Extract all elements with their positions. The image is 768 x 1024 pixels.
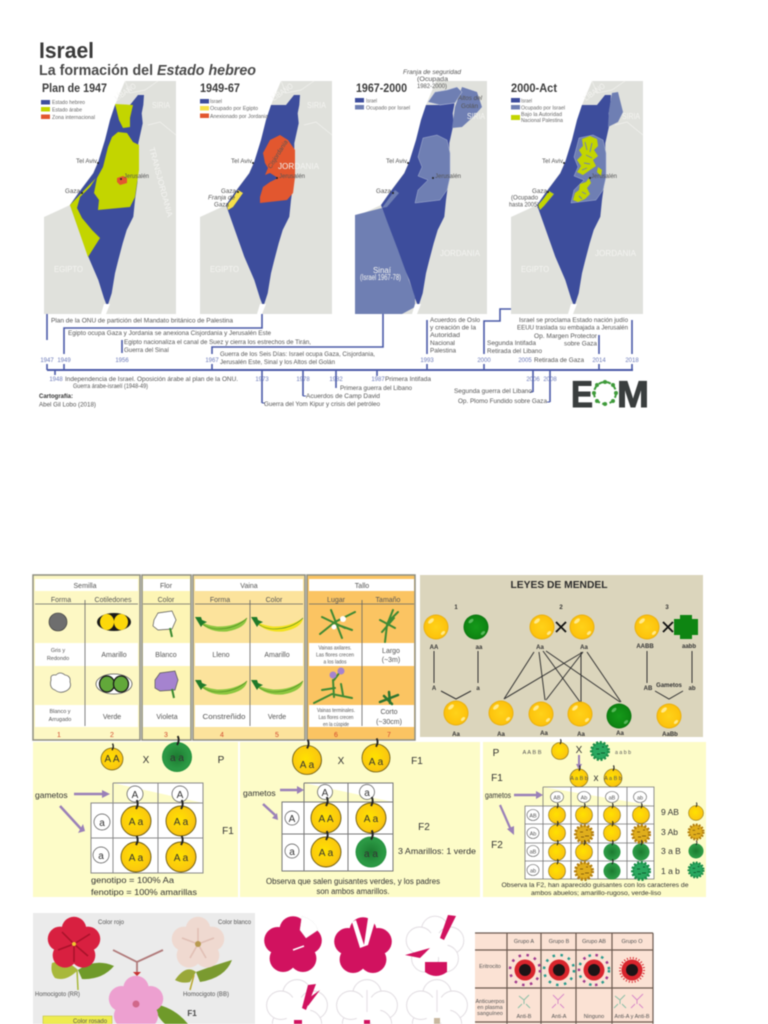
- panel: Leyes de Mendel: aabb: [682, 644, 696, 650]
- panel: tabla de caracteres Vaina: 5: [275, 732, 279, 739]
- panel: cruce dihibrido: AB: [529, 814, 537, 820]
- panel: tabla de caracteres Semilla: Verde: [103, 714, 121, 721]
- panel: cruce dihibrido: Ab: [530, 832, 536, 838]
- panel: cruce dihibrido: F1: [491, 773, 503, 784]
- panel: tabla de caracteres Tallo: Vainas axilares.: [318, 646, 352, 652]
- panel: cruce dihibrido: P: [493, 748, 500, 759]
- panel: Leyes de Mendel: aa: [476, 645, 483, 651]
- panel: cruce dihibrido: ab: [637, 796, 643, 802]
- panel: map 2000-Act: JORDANIA: [595, 249, 637, 258]
- panel: map 2000-Act: Ocupado por Israel: [521, 106, 565, 112]
- panel: Leyes de Mendel: Aa: [580, 645, 588, 651]
- panel: cruce monohibrido F2: a: [289, 847, 295, 858]
- panel: Leyes de Mendel: Aa: [577, 732, 585, 738]
- panel: grupos sanguíneos: [475, 933, 653, 1024]
- panel: cruce monohibrido F1: F1: [222, 826, 234, 837]
- panel: map 1967-2000: Jerusalén: [435, 173, 461, 180]
- timeline: Retirada de Gaza: [534, 358, 585, 364]
- panel: tabla de caracteres Tallo: Largo: [382, 648, 400, 655]
- panel: map Plan de 1947: Gaza: [65, 188, 80, 195]
- panel: map 1949-67: Jerusalén: [279, 173, 305, 180]
- panel: map 2000-Act: Gaza: [532, 188, 547, 195]
- panel: Leyes de Mendel: Aa: [536, 645, 544, 651]
- panel: cruce monohibrido F1: A: [177, 790, 184, 801]
- panel: map Plan de 1947: Estado hebreo: [52, 100, 85, 106]
- logo: EOM: [571, 374, 649, 415]
- timeline: Israel se proclama Estado nación judío: [519, 318, 629, 324]
- panel: cruce monohibrido F1: X: [143, 755, 150, 766]
- panel: map 1967-2000: Franja de seguridad: [403, 69, 461, 76]
- panel: tabla de caracteres Tallo: 7: [387, 732, 391, 739]
- panel: cruce monohibrido F1: A a: [129, 817, 144, 828]
- panel: map 2000-Act: LÍBANO: [582, 82, 607, 103]
- panel: tabla de caracteres Vaina: Constreñido: [202, 714, 246, 721]
- panel: cruce dihibrido: AB: [553, 796, 561, 802]
- panel: cruce dihibrido: gametos: [485, 790, 511, 800]
- panel: herencia color de flor: Color rojo: [98, 919, 124, 926]
- panel: cruce dihibrido: A a B b: [604, 776, 622, 782]
- panel: map 1967-2000: JORDANIA: [440, 249, 481, 258]
- panel: grupos sanguíneos: Eritrocito: [479, 964, 501, 970]
- timeline: Guerra árabe-israelí (1948-49): [73, 384, 148, 390]
- logo: EOM: E: [571, 374, 593, 415]
- panel: map Plan de 1947: EGIPTO: [54, 265, 83, 274]
- panel: Leyes de Mendel: a: [476, 686, 480, 692]
- title: Israel: [39, 38, 94, 63]
- panel: map Plan de 1947: SIRIA: [152, 101, 171, 110]
- panel: tabla de caracteres Tallo: Lugar: [327, 597, 346, 604]
- panel: cruce dihibrido: aB: [530, 850, 537, 856]
- panel: map 1949-67: SIRIA: [307, 101, 327, 110]
- panel: map 1967-2000: [355, 69, 487, 314]
- panel: cruce monohibrido F1: A a: [174, 853, 189, 864]
- panel: tabla de caracteres Tallo: Las flores crecen: [318, 715, 354, 721]
- panel: cruce dihibrido: Ab: [581, 796, 587, 802]
- timeline: 1967: [205, 358, 219, 364]
- timeline: Independencia de Israel. Oposición árabe al plan de la ONU.: [65, 377, 238, 383]
- panel: cruce dihibrido: ambos abuelos; amarillo-rugoso, verde-liso: [531, 890, 661, 897]
- panel: Leyes de Mendel: LEYES DE MENDEL: [510, 579, 608, 591]
- panel: tabla de caracteres Semilla: 1: [57, 732, 61, 739]
- timeline: y creación de la: [430, 326, 477, 332]
- timeline: Palestina: [430, 348, 457, 354]
- panel: map 2000-Act: Tel Aviv: [542, 158, 564, 165]
- panel: map 1967-2000: Tel Aviv: [386, 158, 408, 165]
- panel: tabla de caracteres Flor: Blanco: [155, 652, 177, 659]
- panel: map 1949-67: Tel Aviv: [231, 158, 253, 165]
- panel: map 1949-67: Gaza: [214, 202, 229, 208]
- timeline: Acuerdos de Oslo: [430, 318, 481, 324]
- panel: map 1949-67: Franja de: [208, 194, 235, 202]
- timeline: Retirada del Libano: [487, 349, 543, 355]
- logo: EOM: M: [617, 374, 649, 415]
- timeline: 1982: [329, 377, 343, 383]
- panel: herencia color de flor: Homocigoto (RR): [35, 991, 80, 998]
- timeline: 2014: [592, 358, 606, 364]
- timeline: Op. Plomo Fundido sobre Gaza: [458, 399, 548, 405]
- panel: map 2000-Act: Nacional Palestina: [521, 118, 563, 124]
- panel: cruce monohibrido F2: A a: [369, 757, 384, 768]
- panel: cruce monohibrido F2: [240, 738, 480, 897]
- panel: cruce monohibrido F2: F1: [411, 756, 423, 767]
- panel: map 1949-67: Gaza: [221, 188, 236, 195]
- panel: tabla de caracteres Semilla: [33, 575, 140, 740]
- panel: cruce monohibrido F2: 3 Amarillos: 1 verde: [398, 846, 476, 856]
- panel: Leyes de Mendel: Aa: [616, 731, 624, 737]
- panel: map 2000-Act: hasta 2005): [509, 202, 539, 208]
- panel: Leyes de Mendel: AABB: [636, 644, 654, 650]
- panel: map 1949-67: JORDANIA: [278, 162, 320, 171]
- panel: map 1967-2000: Altos del: [457, 95, 483, 102]
- panel: map Plan de 1947: TRANSJORDANIA: [147, 146, 175, 219]
- panel: tabla de caracteres Tallo: Tamaño: [376, 597, 401, 604]
- panel: tabla de caracteres Tallo: en la cúspide: [323, 722, 349, 728]
- panel: tabla de caracteres Flor: Color: [158, 597, 175, 604]
- panel: map Plan de 1947: Zona internacional: [52, 115, 95, 121]
- panel: tabla de caracteres Tallo: a los lados: [324, 660, 347, 666]
- panel: cruce monohibrido F2: a a: [364, 849, 378, 860]
- timeline: Egipto ocupa Gaza y Jordania se anexiona Cisjordania y Jerusalén Este: [68, 331, 272, 337]
- panel: grupos sanguíneos: Grupo O: [621, 939, 643, 945]
- timeline: 2005: [518, 358, 532, 364]
- panel: Leyes de Mendel: 1: [454, 605, 458, 611]
- panel: map Plan de 1947: Estado árabe: [52, 108, 82, 114]
- panel: map 1967-2000: Ocupado por Israel: [366, 106, 410, 112]
- timeline: Nacional: [430, 341, 455, 347]
- panel: cruce monohibrido F1: a: [99, 818, 105, 829]
- panel: cruce monohibrido F1: a a: [170, 753, 184, 764]
- panel: map 1949-67: LÍBANO: [270, 82, 295, 103]
- panel: Leyes de Mendel: ab: [688, 686, 696, 692]
- panel: Leyes de Mendel: 3: [665, 605, 669, 611]
- panel: tabla de caracteres Semilla: Semilla: [74, 583, 97, 590]
- timeline: 1973: [255, 377, 269, 383]
- panel: Leyes de Mendel: Aa: [452, 732, 460, 738]
- panel: grupos sanguíneos: Grupo B: [549, 939, 570, 945]
- panel: tabla de caracteres Tallo: Las flores crecen: [316, 652, 354, 658]
- panel: cruce dihibrido: Observa la F2, han aparecido guisantes con los caracteres de: [502, 882, 689, 889]
- timeline: Primera Intifada: [385, 377, 432, 383]
- panel: Leyes de Mendel: Aa: [497, 732, 505, 738]
- credit: cartografía: [39, 394, 96, 408]
- panel: Leyes de Mendel: Aa: [540, 731, 548, 737]
- panel: cruce dihibrido: 1 a b: [661, 866, 680, 876]
- panel: map 1949-67: [200, 81, 332, 314]
- timeline: Egipto nacionaliza el canal de Suez y cierra los estrechos de Tirán,: [124, 340, 311, 346]
- panel: map 1949-67: Cisjordania: [267, 139, 290, 170]
- panel: tabla de caracteres Tallo: [307, 575, 415, 740]
- panel: cruce dihibrido: A a B b: [570, 776, 588, 782]
- panel: herencia color de flor: Homocigoto (BB): [183, 991, 229, 998]
- panel: cruce monohibrido F1: P: [218, 755, 225, 766]
- panel: map Plan de 1947: Plan de 1947: [42, 83, 107, 95]
- panel: map 1949-67: Anexionado por Jordania: [210, 114, 268, 120]
- panel: map 1949-67: Israel: [210, 99, 222, 105]
- panel: cruce dihibrido: 3 Ab: [661, 827, 678, 837]
- panel: cruce monohibrido F2: A: [289, 814, 296, 825]
- panel: cruce monohibrido F1: A a: [129, 853, 144, 864]
- panel: cruce dihibrido: a a b b: [615, 750, 631, 756]
- panel: map 2000-Act: 2000-Act: [511, 83, 557, 95]
- panel: Leyes de Mendel: 2: [559, 605, 563, 611]
- timeline: [40, 309, 639, 408]
- timeline: 1978: [296, 377, 310, 383]
- panel: grupos sanguíneos: Ninguno: [584, 1014, 604, 1020]
- panel: grupos sanguíneos: Anti-B: [517, 1014, 532, 1020]
- panel: herencia color de flor: [33, 913, 255, 1024]
- panel: Leyes de Mendel: AB: [644, 686, 653, 692]
- panel: cruce monohibrido F2: A a: [300, 760, 315, 771]
- panel: tabla de caracteres Semilla: Redondo: [47, 656, 69, 662]
- title: La formación del Estado hebreo: [39, 63, 256, 79]
- panel: tabla de caracteres Vaina: Amarillo: [264, 652, 290, 659]
- panel: map 1967-2000: Gaza: [376, 188, 391, 195]
- panel: map 1949-67: Ocupado por Egipto: [210, 106, 258, 112]
- panel: tabla de caracteres Semilla: Blanco y: [49, 709, 71, 715]
- timeline: Acuerdos de Camp David: [306, 394, 380, 400]
- panel: tabla de caracteres Semilla: Gris y: [51, 648, 65, 654]
- panel: grupos sanguíneos: Anti-A: [552, 1014, 567, 1020]
- timeline: 2006: [526, 377, 540, 383]
- panel: map 2000-Act: SIRIA: [622, 112, 641, 121]
- panel: grupos sanguíneos: en plasma: [477, 1005, 504, 1011]
- panel: Leyes de Mendel: [420, 575, 703, 738]
- panel: cruce dihibrido: A A B B: [522, 750, 542, 756]
- panel: map 1967-2000: (Israel 1967-78): [360, 273, 401, 282]
- panel: cruce dihibrido: 9 AB: [661, 807, 679, 817]
- panel: cruce monohibrido F2: son ambos amarillos.: [316, 887, 390, 896]
- panel: map 1967-2000: 1967-2000: [356, 83, 407, 95]
- panel: Leyes de Mendel: A: [432, 686, 437, 692]
- panel: Leyes de Mendel: AA: [430, 645, 439, 651]
- panel: map 1967-2000: Golán: [461, 103, 478, 110]
- panel: map 1949-67: 1949-67: [200, 83, 240, 95]
- panel: tabla de caracteres Tallo: Vainas terminales.: [317, 708, 355, 714]
- timeline: Guerra de los Seis Días: Israel ocupa Gaza, Cisjordania,: [220, 352, 375, 358]
- credit: cartografía: Abel Gil Lobo (2018): [39, 402, 96, 408]
- panel: map Plan de 1947: Jerusalén: [124, 173, 149, 180]
- timeline: Plan de la ONU de partición del Mandato británico de Palestina: [51, 318, 234, 324]
- panel: cruce dihibrido: x: [594, 773, 598, 784]
- panel: cruce monohibrido F2: A: [322, 788, 329, 799]
- timeline: Jerusalén Este, Sinaí y los Altos del Golán: [220, 360, 335, 366]
- timeline: 1956: [115, 358, 129, 364]
- timeline: Primera guerra del Libano: [340, 386, 413, 392]
- timeline: Op. Margen Protector: [534, 334, 597, 340]
- panel: cruce monohibrido F2: X: [338, 756, 345, 767]
- panel: tabla de caracteres Vaina: [193, 575, 305, 740]
- panel: map 1967-2000: Sinaí: [373, 266, 392, 275]
- panel: grupos sanguíneos: Grupo A: [514, 939, 534, 945]
- panel: map 1967-2000: Israel: [366, 98, 377, 104]
- panel: tabla de caracteres Vaina: Vaina: [240, 583, 258, 590]
- panel: cruce monohibrido F1: A a: [174, 817, 189, 828]
- timeline: 1949: [57, 358, 71, 364]
- panel: herencia color de flor: F1: [187, 1009, 197, 1018]
- panel: tabla de caracteres Vaina: Color: [266, 597, 283, 604]
- panel: map 2000-Act: Bajo la Autoridad: [521, 112, 562, 118]
- panel: cruce monohibrido F1: gametos: [35, 790, 68, 800]
- panel: tabla de caracteres Vaina: 4: [220, 732, 224, 739]
- panel: tabla de caracteres Flor: Violeta: [156, 714, 178, 721]
- panel: tabla de caracteres Tallo: Corto: [380, 709, 398, 716]
- panel: cruce monohibrido F2: a: [364, 788, 370, 799]
- panel: map 2000-Act: Jerusalén: [591, 173, 617, 180]
- panel: cruce monohibrido F1: fenotipo = 100% amarillas: [91, 887, 197, 897]
- panel: cruce dihibrido: [483, 739, 706, 897]
- timeline: 1993: [420, 358, 434, 364]
- timeline: Segunda Intifada: [487, 341, 537, 347]
- panel: cruce monohibrido F1: a: [98, 851, 104, 862]
- panel: tabla de caracteres Semilla: Amarillo: [101, 652, 127, 659]
- panel: tabla de caracteres Tallo: (~3m): [382, 657, 400, 664]
- timeline: Guerra del Sinaí: [124, 348, 169, 354]
- timeline: 2018: [625, 358, 639, 364]
- panel: tabla de caracteres Vaina: Lleno: [212, 652, 230, 659]
- panel: cruce monohibrido F1: A: [132, 790, 139, 801]
- panel: map 1967-2000: SIRIA: [467, 112, 486, 121]
- timeline: 2008: [543, 377, 557, 383]
- panel: map 2000-Act: Israel: [521, 98, 532, 104]
- panel: map Plan de 1947: [41, 81, 176, 314]
- panel: cruce dihibrido: aB: [609, 796, 616, 802]
- panel: grupos sanguíneos: Grupo AB: [582, 939, 606, 945]
- timeline: 1947: [40, 358, 54, 364]
- panel: cruce dihibrido: X: [576, 745, 583, 756]
- panel: tabla de caracteres Flor: Flor: [160, 583, 173, 590]
- panel: tabla de caracteres Tallo: Tallo: [355, 583, 369, 590]
- panel: map 1967-2000: (Ocupada: [417, 76, 448, 83]
- panel: map 1967-2000: 1982-2000): [417, 83, 447, 90]
- panel: tabla de caracteres Semilla: 2: [110, 732, 114, 739]
- timeline: Autoridad: [430, 333, 460, 339]
- panel: tabla de caracteres Tallo: (~30cm): [376, 719, 402, 726]
- panel: map 2000-Act: EGIPTO: [521, 265, 549, 274]
- panel: map Plan de 1947: Tel Aviv: [76, 158, 98, 165]
- panel: grupos sanguíneos: sanguíneo: [477, 1011, 503, 1017]
- panel: herencia color de flor: Color blanco: [218, 919, 251, 926]
- panel: tabla de caracteres Vaina: Verde: [268, 714, 286, 721]
- panel: tabla de caracteres Semilla: Arrugado: [49, 717, 71, 723]
- timeline: sobre Gaza: [564, 342, 598, 348]
- panel: tabla de caracteres Flor: 3: [164, 732, 168, 739]
- panel: grupos sanguíneos: Anticuerpos: [475, 999, 505, 1005]
- panel: map 2000-Act: [509, 81, 643, 314]
- timeline: Guerra del Yom Kipur y crisis del petróleo: [264, 402, 381, 408]
- panel: tabla de caracteres Vaina: Forma: [210, 597, 230, 604]
- panel: map Plan de 1947: LÍBANO: [113, 82, 138, 103]
- panel: cruce dihibrido: ab: [530, 868, 536, 874]
- panel: map 2000-Act: (Ocupado: [511, 194, 538, 202]
- panel: tabla de caracteres Tallo: 6: [334, 732, 338, 739]
- panel: cruce monohibrido F2: A a: [319, 848, 334, 859]
- timeline: 2000: [477, 358, 491, 364]
- panel: cruce monohibrido F2: A a: [364, 814, 379, 825]
- panel: cruce monohibrido F1: A A: [104, 754, 120, 765]
- timeline: 1948: [49, 377, 63, 383]
- panel: tabla de caracteres Semilla: Forma: [51, 597, 71, 604]
- panel: cruce monohibrido F2: gametos: [243, 788, 276, 798]
- timeline: Segunda guerra del Libano: [454, 389, 533, 395]
- panel: grupos sanguíneos: Anti-A y Anti-B: [614, 1014, 650, 1020]
- panel: tabla de caracteres Semilla: Cotiledones: [95, 597, 132, 604]
- panel: Leyes de Mendel: AaBb: [662, 732, 678, 738]
- panel: Leyes de Mendel: Gametos: [656, 683, 682, 689]
- timeline: 1987: [371, 377, 385, 383]
- panel: cruce dihibrido: 3 a B: [661, 846, 681, 856]
- panel: cruce monohibrido F2: Observa que salen guisantes verdes, y los padres: [266, 877, 440, 886]
- panel: map 1949-67: EGIPTO: [210, 265, 239, 274]
- panel: petunias variegadas: [264, 915, 467, 1024]
- title: [39, 38, 256, 79]
- panel: cruce monohibrido F1: genotipo = 100% Aa: [91, 875, 174, 885]
- panel: cruce monohibrido F2: A A: [318, 814, 334, 825]
- panel: cruce monohibrido F2: F2: [418, 822, 430, 833]
- timeline: EEUU traslada su embajada a Jerusalén: [517, 326, 628, 332]
- panel: cruce monohibrido F1: [33, 736, 238, 897]
- panel: cruce dihibrido: F2: [491, 840, 503, 851]
- panel: tabla de caracteres Flor: [142, 575, 191, 740]
- credit: cartografía: Cartografía:: [39, 394, 73, 400]
